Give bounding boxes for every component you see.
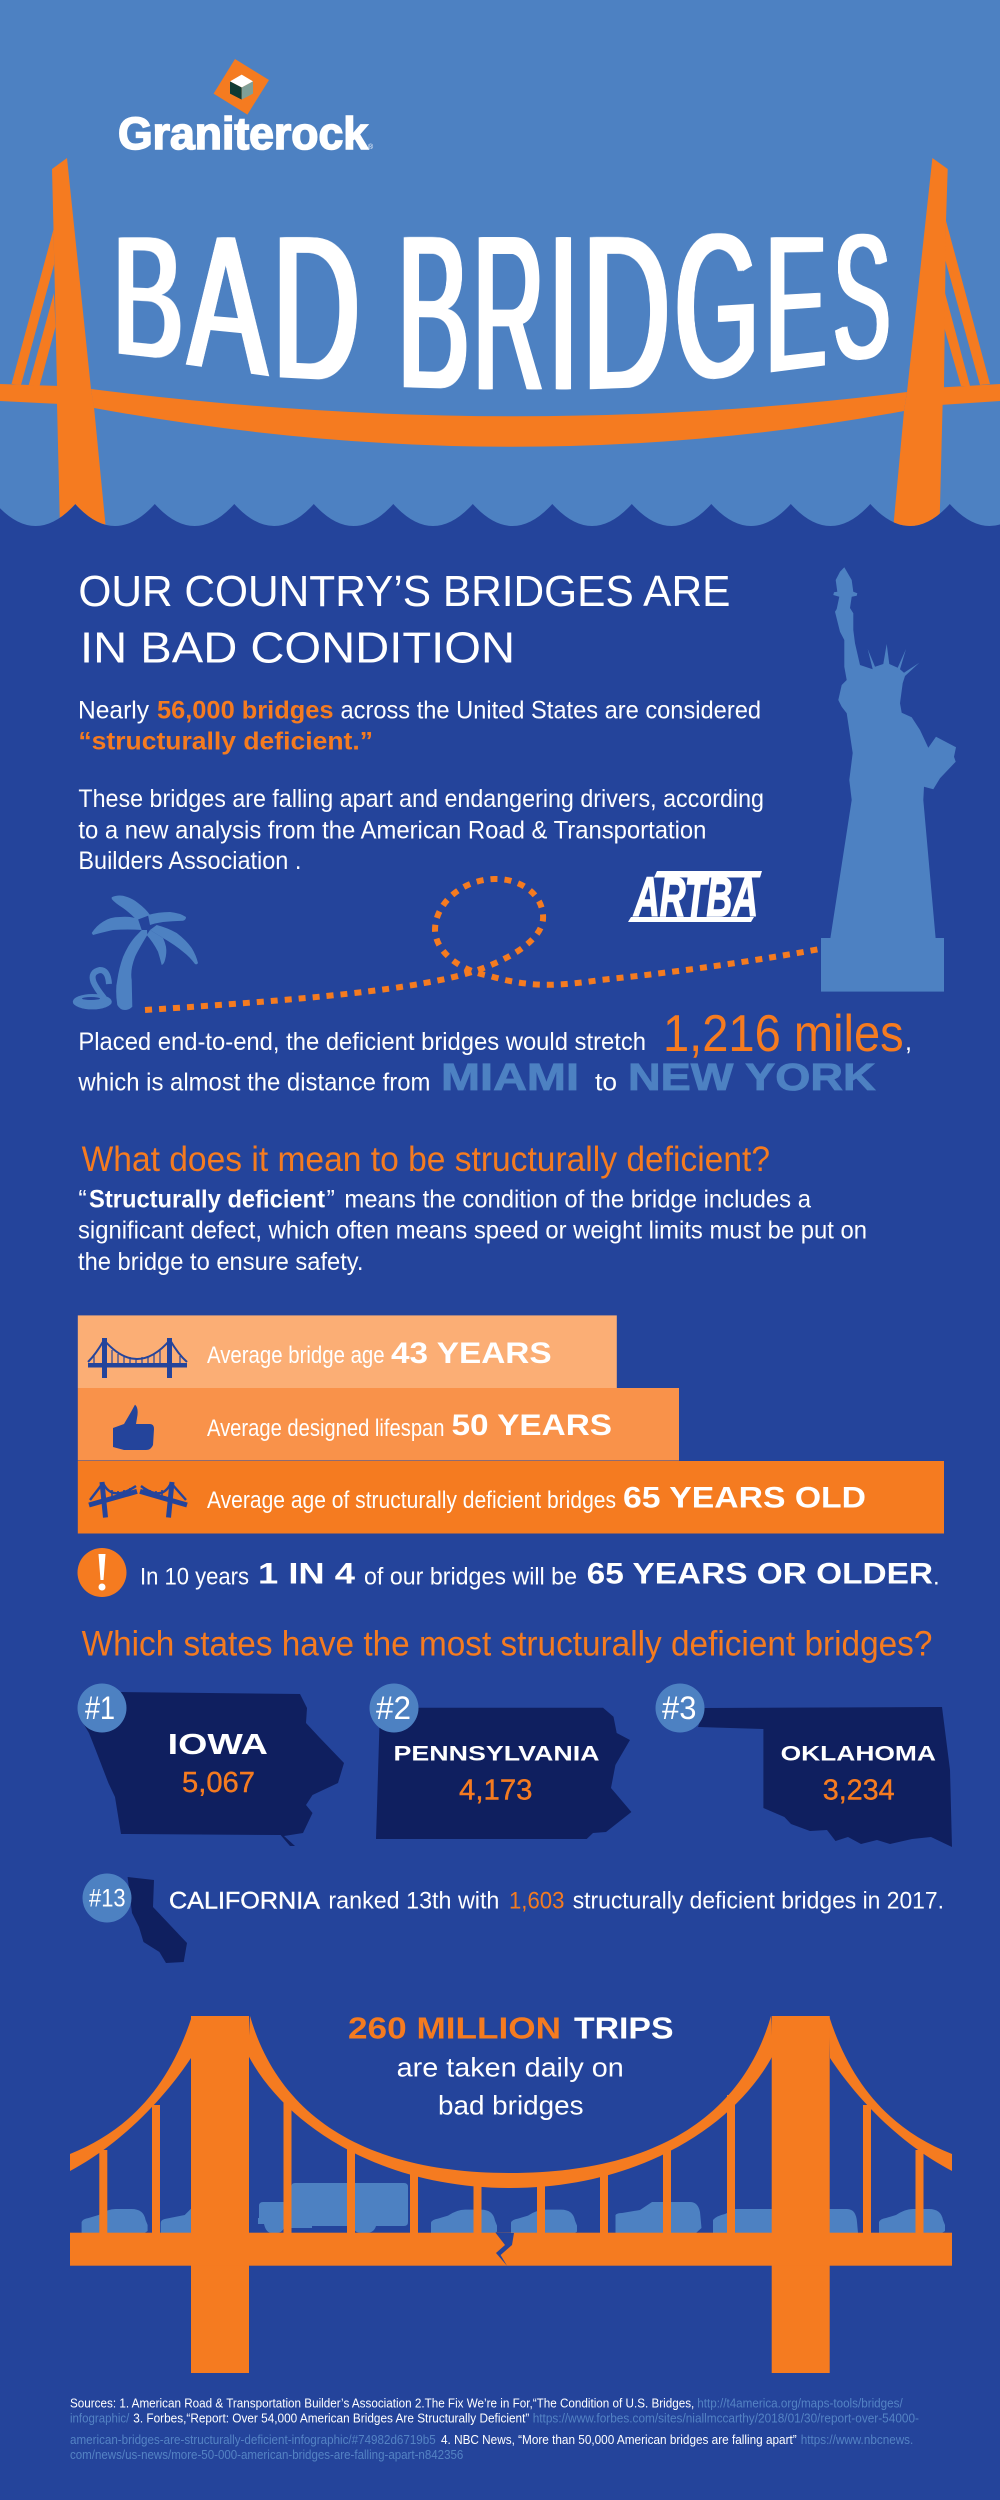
distance text: to <box>595 1068 617 1096</box>
intro paragraph: Builders Association . <box>78 847 301 875</box>
intro paragraph: across the United States are considered <box>340 696 761 724</box>
title: BAD BRIDGES: E <box>765 195 826 416</box>
sources: american-bridges-are-structurally-deficient-infographic/#74982d6719b5 <box>70 2432 436 2447</box>
ARTBA logo: ARTBA <box>633 865 758 928</box>
main cables <box>70 2016 952 2188</box>
icon: broken bridge <box>89 1482 187 1518</box>
distance text: NEW YORK <box>628 1057 876 1099</box>
deck crack <box>496 2233 514 2266</box>
bar: average bridge age: Average bridge age <box>207 1342 385 1369</box>
title: BAD BRIDGES: B <box>397 190 469 438</box>
towers <box>191 2016 830 2373</box>
callout: 1 in 4 bridges <box>78 1548 940 1597</box>
icon: Statue of Liberty <box>821 567 956 992</box>
sources: https://www.nbcnews. <box>801 2432 913 2447</box>
callout: 1 in 4 bridges: of our bridges will be <box>364 1563 577 1590</box>
sources: com/news/us-news/more-50-000-american-bridges-are-falling-apart-n842356 <box>70 2447 463 2462</box>
heading: which states: Which states have the most structurally deficient bridges? <box>82 1625 932 1664</box>
state: Iowa <box>78 1684 344 1846</box>
sources: Sources: 1. American Road & Transportation Builder’s Association 2.The Fix We’re in For,“The Condition of U.S. Bridges, <box>70 2395 694 2410</box>
ARTBA logo <box>628 865 762 928</box>
sources: 4. NBC News, “More than 50,000 American bridges are falling apart” <box>441 2432 797 2447</box>
title: BAD BRIDGES <box>113 190 890 438</box>
intro paragraph: to a new analysis from the American Road & Transportation <box>78 816 706 844</box>
icon: exclamation mark <box>78 1548 126 1597</box>
bar: age of deficient bridges: 65 YEARS OLD <box>623 1482 866 1514</box>
header bridge illustration <box>0 158 1000 530</box>
callout: 260 million trips: bad bridges <box>438 2090 584 2120</box>
state: Oklahoma <box>656 1684 952 1847</box>
intro paragraph: These bridges are falling apart and endangering drivers, according <box>78 785 764 813</box>
suspension hangers <box>99 2095 924 2235</box>
rank badge #2 <box>370 1684 418 1732</box>
definition paragraph: means the condition of the bridge includes a <box>344 1186 811 1214</box>
bar: designed lifespan <box>78 1388 679 1460</box>
logo wordmark: Graniterock <box>118 108 369 159</box>
state: California <box>82 1874 944 1963</box>
callout: 1 in 4 bridges: In 10 years <box>140 1563 249 1590</box>
rank badge #3 <box>656 1684 704 1732</box>
title: BAD BRIDGES: D <box>273 192 359 427</box>
distance text: MIAMI <box>441 1057 579 1099</box>
definition paragraph: “ <box>78 1186 87 1214</box>
state: Oklahoma: OKLAHOMA <box>781 1742 936 1766</box>
definition paragraph <box>78 1186 867 1276</box>
title: BAD BRIDGES: A <box>188 195 266 420</box>
icon: thumbs up <box>113 1405 154 1450</box>
callout: 260 million trips: are taken daily on <box>397 2053 624 2083</box>
logo diamond <box>214 59 269 115</box>
bar: average bridge age <box>78 1315 617 1388</box>
sources: http://t4america.org/maps-tools/bridges/ <box>697 2395 903 2410</box>
state: California: structurally deficient bridges in 2017. <box>573 1888 944 1915</box>
callout: 260 million trips <box>348 2011 674 2120</box>
state: Pennsylvania <box>370 1684 631 1839</box>
bar: designed lifespan: Average designed lifespan <box>207 1415 444 1442</box>
icon: palm tree and flamingo <box>73 896 198 1010</box>
rank badge #3: #3 <box>662 1690 696 1726</box>
bar: average bridge age: 43 YEARS <box>391 1337 552 1370</box>
rank badge #13 <box>82 1874 132 1922</box>
definition paragraph: significant defect, which often means speed or weight limits must be put on <box>78 1217 867 1245</box>
heading: our country's bridges: IN BAD CONDITION <box>80 624 515 672</box>
state: Oklahoma: 3,234 <box>823 1774 895 1806</box>
rank badge #2: #2 <box>376 1690 411 1726</box>
title: BAD BRIDGES: B <box>113 199 183 400</box>
state: Pennsylvania: 4,173 <box>459 1774 532 1806</box>
state: Iowa: 5,067 <box>182 1767 255 1799</box>
rank badge #13: #13 <box>89 1885 126 1913</box>
intro paragraph: 56,000 bridges <box>157 696 334 724</box>
title: BAD BRIDGES: G <box>674 190 758 428</box>
distance text: Placed end-to-end, the deficient bridges would stretch <box>78 1028 646 1056</box>
title: BAD BRIDGES: S <box>833 197 890 401</box>
sources <box>70 2395 919 2462</box>
intro paragraph <box>78 696 764 875</box>
bar: age of deficient bridges <box>78 1461 944 1534</box>
title: BAD BRIDGES: D <box>582 190 669 438</box>
map: Oklahoma <box>698 1707 952 1847</box>
sources: https://www.forbes.com/sites/niallmccarthy/2018/01/30/report-over-54000- <box>533 2411 919 2426</box>
road deck <box>70 2233 952 2266</box>
large bridge illustration <box>70 2016 952 2373</box>
bar: age of deficient bridges: Average age of structurally deficient bridges <box>207 1487 616 1514</box>
title: BAD BRIDGES: R <box>473 190 544 438</box>
icon: bridge <box>88 1338 187 1378</box>
callout: 260 million trips: TRIPS <box>574 2011 674 2045</box>
state: California: ranked 13th with <box>328 1888 499 1915</box>
sources: infographic/ <box>70 2411 130 2426</box>
header sky with scalloped waves <box>0 0 1000 526</box>
dotted route from Miami to New York <box>145 879 820 1010</box>
distance text: , <box>905 1028 912 1056</box>
sources: 3. Forbes,“Report: Over 54,000 American Bridges Are Structurally Deficient” <box>133 2411 529 2426</box>
rank badge #1 <box>78 1684 126 1732</box>
intro paragraph: Nearly <box>78 696 149 724</box>
logo: Graniterock <box>118 59 374 159</box>
map: Iowa <box>83 1692 344 1846</box>
distance text: which is almost the distance from <box>77 1068 430 1096</box>
callout: 1 in 4 bridges: 65 YEARS OR OLDER <box>587 1558 933 1591</box>
state: Iowa: IOWA <box>168 1729 268 1761</box>
state: Pennsylvania: PENNSYLVANIA <box>394 1742 600 1766</box>
cars and truck <box>82 2183 945 2234</box>
map: California <box>128 1877 187 1963</box>
logo wordmark: ® <box>368 143 374 151</box>
distance text <box>77 1005 912 1099</box>
state: California: CALIFORNIA <box>169 1888 320 1915</box>
distance text: 1,216 miles <box>663 1005 904 1063</box>
bar: designed lifespan: 50 YEARS <box>452 1409 612 1442</box>
callout: 1 in 4 bridges: 1 IN 4 <box>258 1558 355 1591</box>
definition paragraph: the bridge to ensure safety. <box>78 1248 364 1276</box>
heading: our country's bridges <box>78 567 730 672</box>
state: California: 1,603 <box>509 1888 564 1915</box>
callout: 260 million trips: 260 MILLION <box>348 2011 561 2045</box>
intro paragraph: “structurally deficient.” <box>78 728 373 756</box>
callout: 1 in 4 bridges: . <box>933 1563 940 1590</box>
logo cube <box>230 75 253 100</box>
definition paragraph: Structurally deficient <box>89 1186 326 1214</box>
map: Pennsylvania <box>376 1708 631 1839</box>
heading: our country's bridges: OUR COUNTRY’S BRIDGES ARE <box>78 567 730 616</box>
definition paragraph: ” <box>326 1186 335 1214</box>
heading: what does it mean: What does it mean to be structurally deficient? <box>82 1140 770 1179</box>
title: BAD BRIDGES: I <box>548 190 578 438</box>
rank badge #1: #1 <box>85 1690 115 1726</box>
